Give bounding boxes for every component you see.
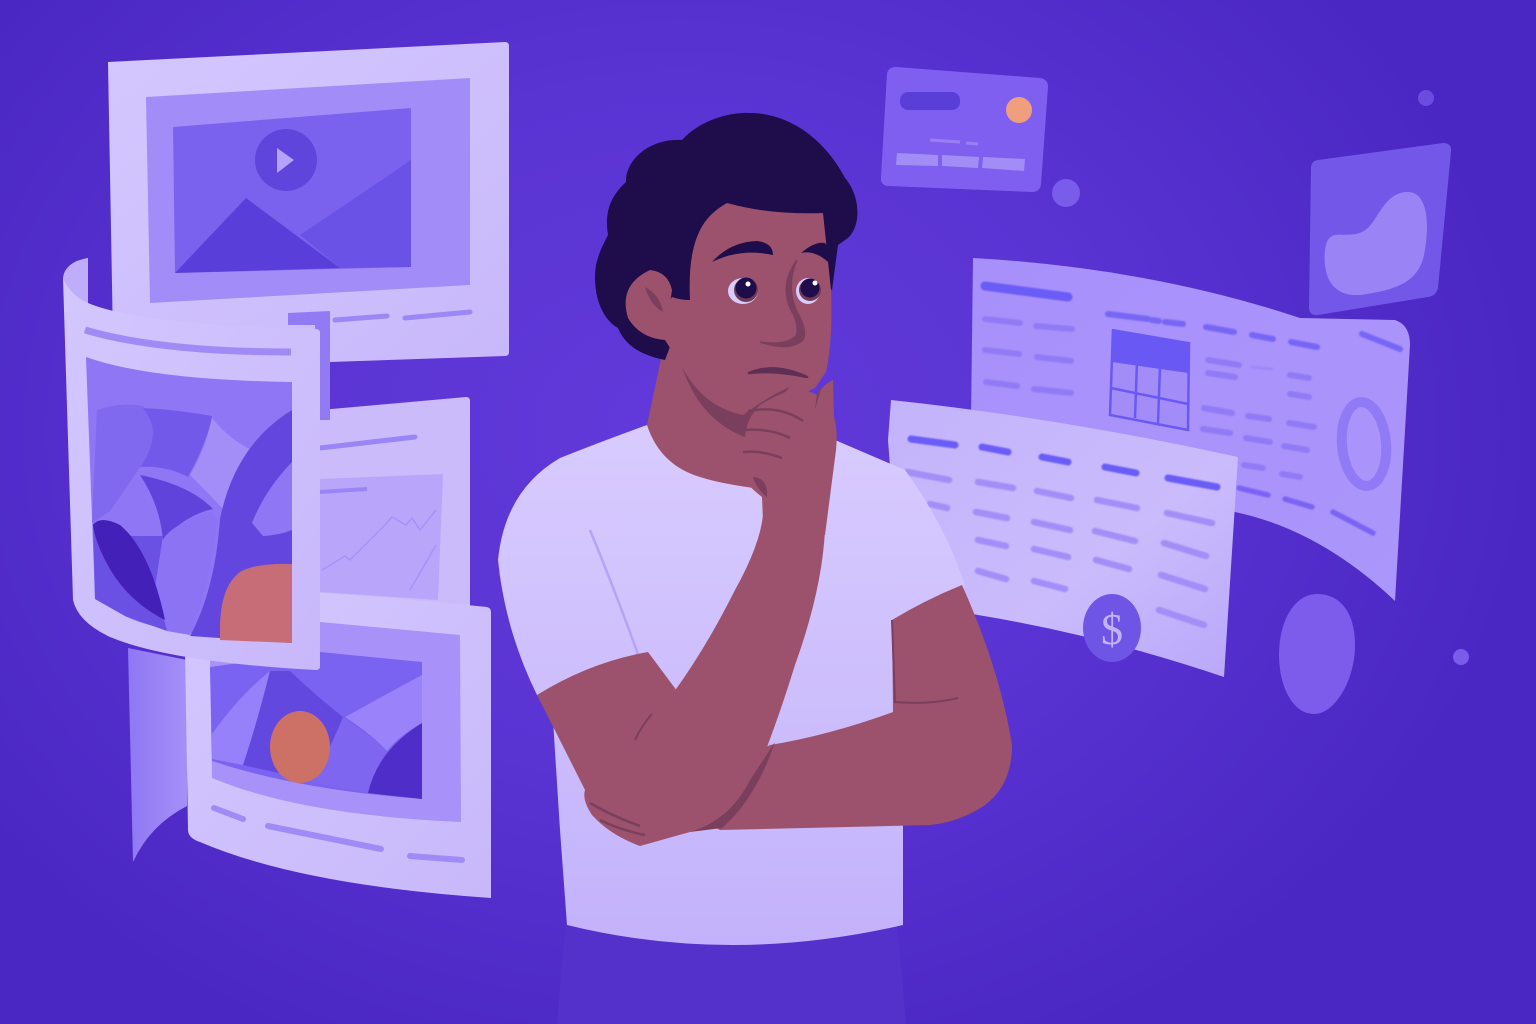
upper arm: viewer left [537, 652, 680, 800]
arm: viewer right, folded [660, 585, 1012, 830]
elbow shadow [690, 742, 775, 832]
nose [760, 260, 804, 347]
panel: video player [108, 42, 509, 362]
hand [737, 380, 837, 535]
floating dot: upper right [1418, 90, 1434, 106]
floating dot: lower right [1453, 649, 1469, 665]
caption lines [335, 312, 470, 320]
caption lines [214, 808, 462, 860]
floating dot: near card [1052, 179, 1080, 207]
sleeve crease [590, 530, 640, 660]
panel: curved art card [63, 258, 320, 670]
ear [626, 270, 672, 340]
panel: small blob card [1309, 143, 1451, 315]
mouth [749, 368, 807, 377]
panel: chart document [320, 397, 470, 612]
face [665, 203, 831, 415]
line chart [322, 510, 436, 590]
front sheet text rows [907, 439, 1217, 625]
lower card image [210, 652, 422, 799]
hair [595, 113, 857, 360]
table grid [1110, 329, 1189, 430]
panel: lower image card [185, 593, 491, 898]
neck [647, 340, 800, 490]
inner arm crease [635, 714, 652, 740]
panel: back table sheet [971, 258, 1410, 601]
trousers [557, 920, 906, 1024]
t-shirt [498, 425, 965, 945]
icon: dollar coin [1083, 594, 1141, 662]
icon: dollar coin: $ [1101, 605, 1123, 654]
video thumbnail [173, 108, 411, 273]
eyes [728, 278, 821, 304]
person [498, 113, 1012, 1024]
icon: play button [255, 129, 317, 191]
arm fold lines [892, 620, 958, 703]
ring chart [1338, 400, 1390, 488]
panel: front table sheet [888, 400, 1238, 677]
chin shadow [682, 367, 790, 437]
back sheet text rows [985, 286, 1400, 533]
card: credit card [881, 67, 1048, 192]
artwork [86, 357, 292, 643]
floating egg shape [1279, 594, 1355, 714]
bookmark tab [288, 311, 330, 420]
panel: curled strip behind lower left [128, 648, 187, 862]
eyebrows [712, 241, 829, 262]
tucked fingers [584, 790, 690, 846]
finger lines [590, 803, 645, 835]
forearm and hand on chin [590, 515, 825, 832]
